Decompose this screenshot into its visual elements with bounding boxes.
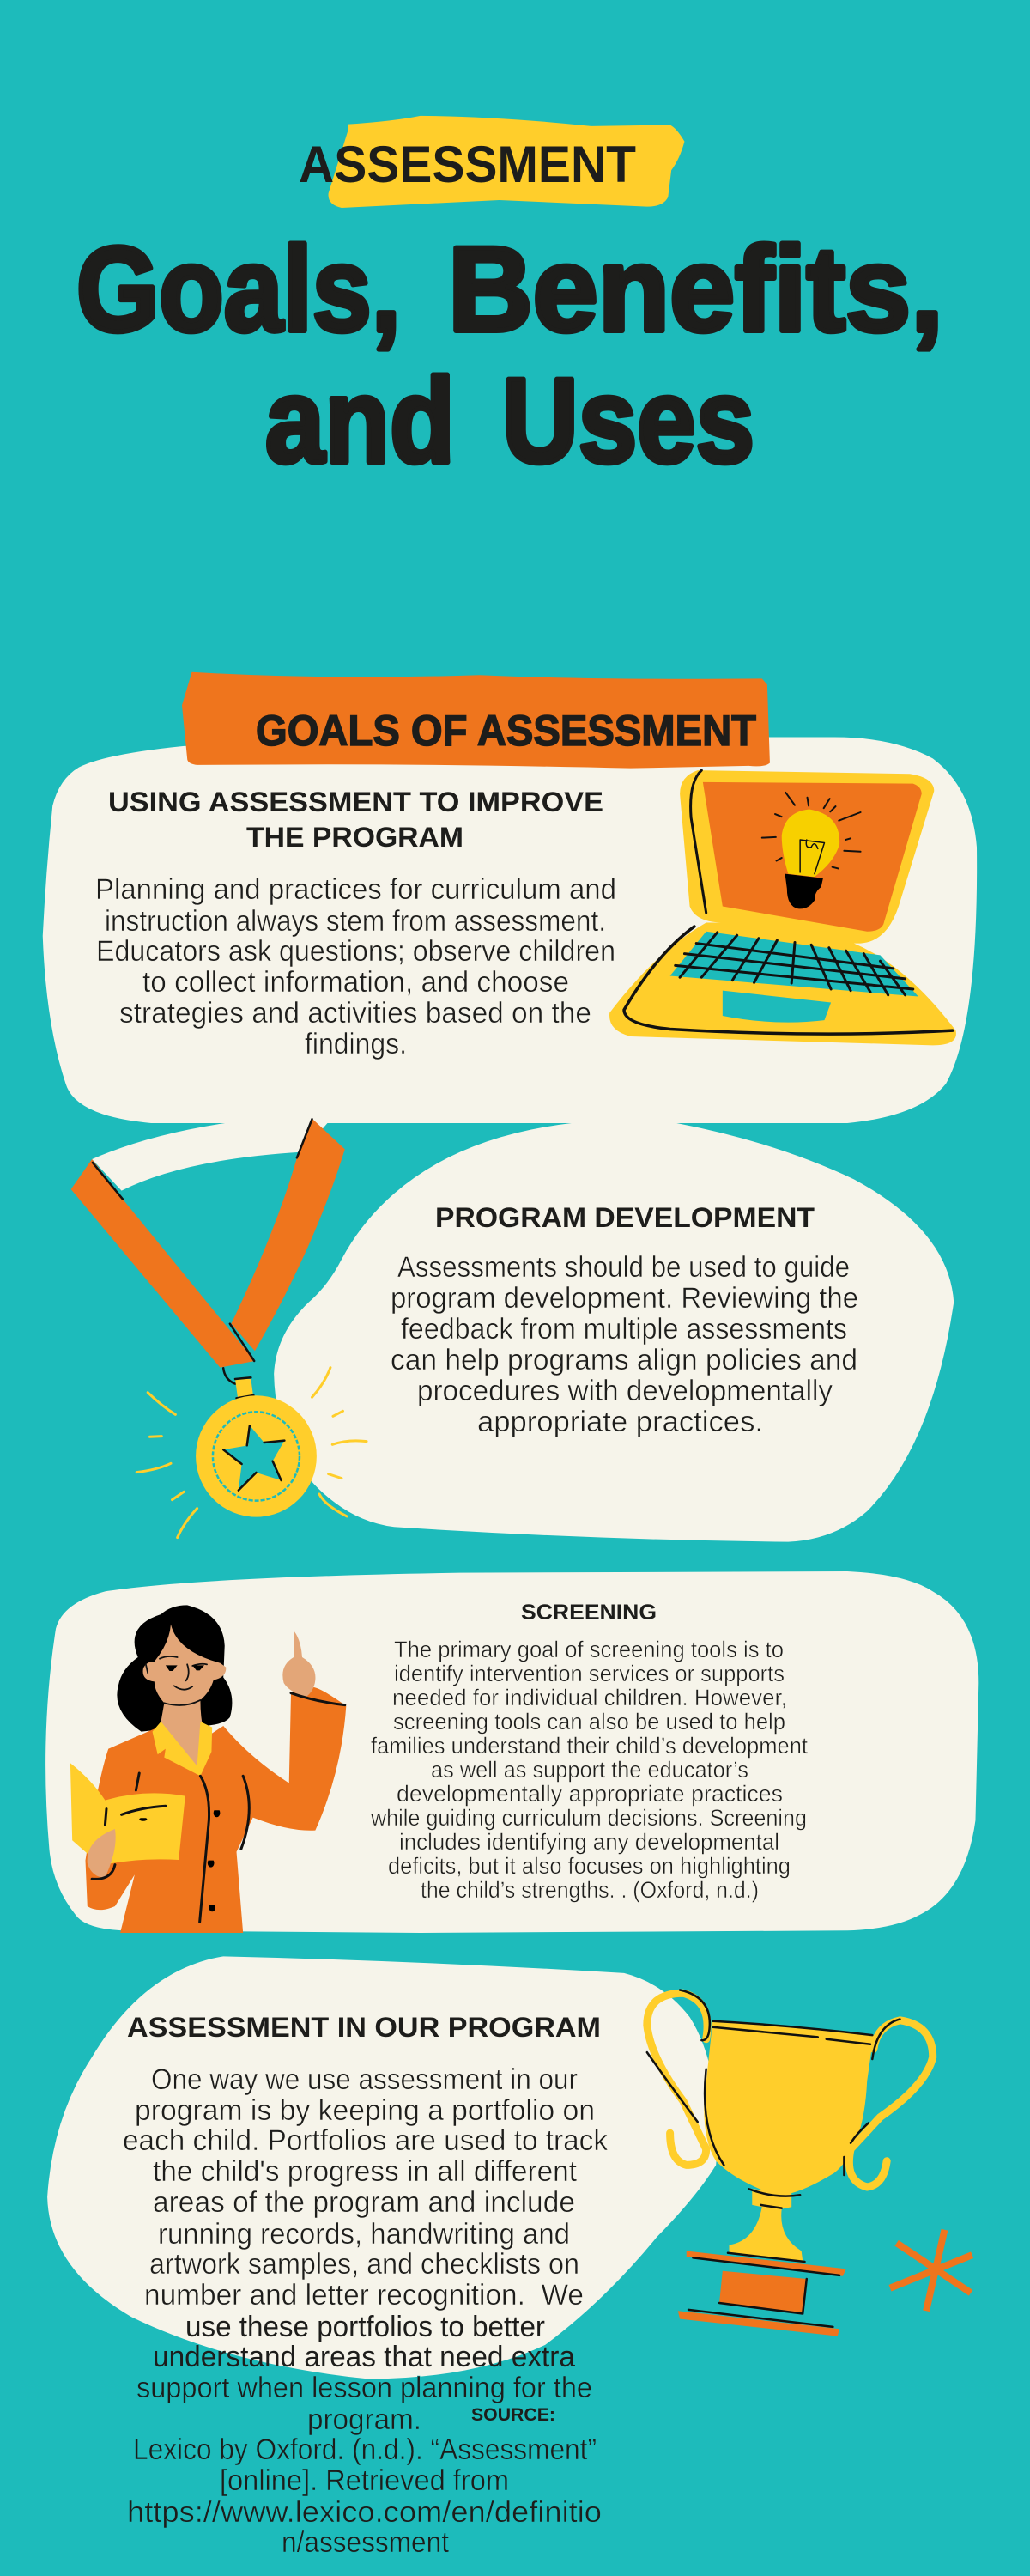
body text: screening: while guiding curriculum decisions. Screening [370, 1805, 807, 1831]
body text: screening: families understand their child’s development [371, 1733, 808, 1759]
icon: laptop with light bulb [609, 770, 956, 1045]
heading: screening: SCREENING [521, 1601, 657, 1625]
body text: using assessment: Planning and practices for curriculum and [95, 873, 616, 906]
body text: assessment in our program: n/assessment [282, 2526, 450, 2559]
body text: screening: deficits, but it also focuses on highlighting [388, 1853, 791, 1879]
body text: assessment in our program: One way we use assessment in our [151, 2063, 578, 2096]
heading: using assessment [108, 787, 603, 853]
body text: assessment in our program: understand areas that need extra [153, 2341, 575, 2373]
body text: program development [391, 1251, 858, 1438]
cream crescent behind ribbon [92, 1122, 329, 1191]
body text: assessment in our program: running records, handwriting and [158, 2218, 570, 2251]
title: Uses [502, 353, 754, 488]
body text: screening: developmentally appropriate practices [397, 1781, 783, 1807]
title: and [265, 353, 455, 488]
banner heading: GOALS OF ASSESSMENT [256, 707, 756, 755]
body text: screening [370, 1637, 808, 1903]
body text: assessment in our program: https://www.lexico.com/en/definitio [127, 2496, 602, 2529]
icon: orange asterisk [890, 2230, 972, 2311]
body text: assessment in our program: the child's progress in all different [153, 2155, 578, 2188]
body text: screening: as well as support the educator’s [431, 1757, 748, 1783]
body text: using assessment: strategies and activities based on the [119, 997, 591, 1030]
body text: screening: needed for individual children. However, [392, 1685, 787, 1710]
body text: using assessment: to collect information, and choose [142, 966, 569, 999]
body text: program development: program development. Reviewing the [391, 1282, 858, 1315]
body text: assessment in our program: program is by keeping a portfolio on [135, 2094, 595, 2127]
panel: using assessment to improve the program [43, 738, 977, 1123]
heading: using assessment: USING ASSESSMENT TO IMPROVE [108, 787, 603, 817]
icon: medal with ribbon [71, 1119, 367, 1538]
body text: program development: appropriate practices. [477, 1406, 763, 1438]
body text: screening: identify intervention services or supports [394, 1661, 785, 1686]
body text: program development: procedures with developmentally [417, 1375, 833, 1407]
title [76, 222, 943, 488]
panel: assessment in our program [47, 1956, 717, 2379]
body text: assessment in our program: artwork samples, and checklists on [149, 2248, 579, 2281]
source label: SOURCE: [471, 2405, 555, 2425]
body text: program development: can help programs align policies and [391, 1344, 857, 1376]
body text: screening: includes identifying any developmental [399, 1829, 779, 1855]
body text: assessment in our program: [online]. Retrieved from [220, 2464, 509, 2497]
heading: program development: PROGRAM DEVELOPMENT [435, 1202, 815, 1233]
body text: assessment in our program: Lexico by Oxford. (n.d.). “Assessment” [133, 2433, 597, 2466]
kicker: ASSESSMENT: ASSESSMENT [299, 136, 636, 193]
body text: assessment in our program: program. [307, 2403, 421, 2436]
heading: assessment in our program: ASSESSMENT IN OUR PROGRAM [127, 2012, 601, 2043]
title: Benefits, [448, 222, 943, 356]
body text: program development: feedback from multiple assessments [401, 1313, 847, 1346]
panel: screening [45, 1571, 978, 1933]
body text: using assessment: instruction always stem from assessment. [105, 905, 606, 938]
yellow brush highlight behind kicker [329, 116, 684, 208]
body text: program development: Assessments should be used to guide [397, 1251, 850, 1284]
icon: trophy [647, 1990, 933, 2336]
body text: screening: screening tools can also be used to help [393, 1709, 785, 1735]
body text: using assessment: Educators ask questions; observe children [96, 935, 615, 968]
icon: teacher holding a book and pointing up [70, 1605, 346, 1933]
body text: screening: The primary goal of screening tools is to [394, 1637, 784, 1662]
body text: assessment in our program: use these portfolios to better [185, 2311, 545, 2343]
body text: assessment in our program: number and letter recognition. We [144, 2279, 584, 2312]
title: Goals, [76, 222, 401, 356]
panel: program development [274, 1123, 954, 1542]
orange banner [182, 672, 770, 769]
body text: assessment in our program: areas of the program and include [153, 2186, 575, 2219]
body text: assessment in our program: support when lesson planning for the [136, 2372, 592, 2404]
heading: using assessment: THE PROGRAM [246, 822, 464, 853]
body text: using assessment [95, 873, 616, 1060]
body text: screening: the child’s strengths. . (Oxford, n.d.) [421, 1877, 759, 1903]
body text: assessment in our program [123, 2063, 609, 2559]
body text: using assessment: findings. [305, 1028, 407, 1060]
body text: assessment in our program: each child. Portfolios are used to track [123, 2124, 609, 2157]
